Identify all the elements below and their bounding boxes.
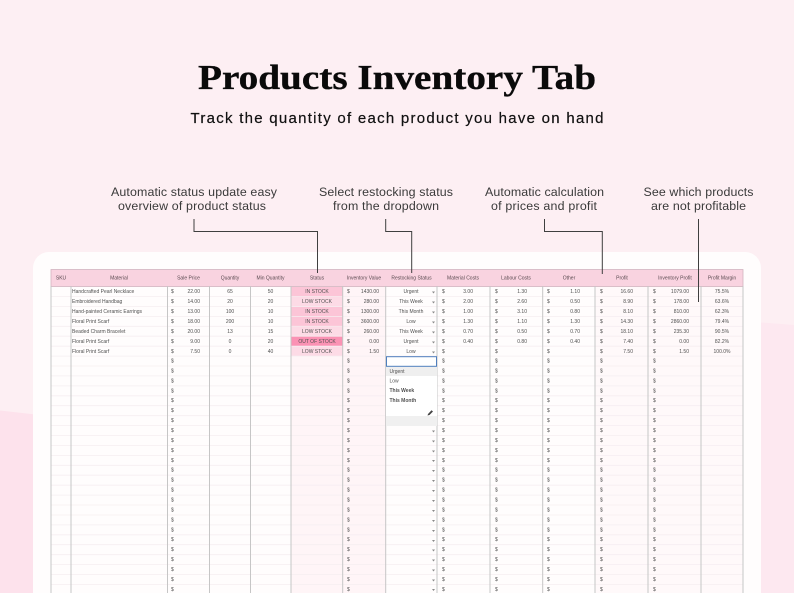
row 1: Urgent — [403, 289, 419, 295]
row 5: $ — [442, 329, 445, 335]
empty rows: currency signs: $$$$$$$ — [171, 388, 656, 394]
row 6: $ — [600, 339, 603, 345]
row 4: 200 — [226, 319, 234, 325]
empty rows: currency signs: $$$$$$$ — [171, 527, 656, 533]
empty rows: currency signs: $$$$$$$ — [171, 488, 656, 494]
callout: automatic calculation — [485, 185, 604, 213]
row 3: 810.00 — [674, 309, 689, 315]
restocking dropdown: Urgent — [390, 369, 405, 375]
row 1: 50 — [268, 289, 273, 295]
row 5: 0.50 — [517, 329, 527, 335]
row 5: 15 — [268, 329, 273, 335]
row 4: $ — [600, 319, 603, 325]
row 7: Floral Print Scarf — [72, 349, 110, 355]
empty rows: currency signs: $$$$$$$ — [171, 547, 656, 553]
row 7: 0 — [229, 349, 232, 355]
header row: Profit — [616, 276, 628, 282]
header row: Status — [310, 276, 325, 282]
empty rows: currency signs: $$$$$$$ — [171, 408, 656, 414]
row 3: 1.00 — [463, 309, 473, 315]
row 6: Urgent — [403, 339, 419, 345]
row 3: 10 — [268, 309, 273, 315]
row 3: $ — [347, 309, 350, 315]
row 6: $ — [653, 339, 656, 345]
row 5: 0.70 — [570, 329, 580, 335]
row 6: 0.00 — [369, 339, 379, 345]
restocking dropdown: This Month — [390, 398, 416, 404]
empty rows: currency signs: $$$$$$$ — [171, 517, 656, 523]
row 4: 1.10 — [517, 319, 527, 325]
header row: Labour Costs — [501, 276, 531, 282]
callout: restocking status — [319, 185, 453, 213]
empty rows: currency signs: $$$$$$$ — [171, 478, 656, 484]
empty rows: currency signs: $$$$$$$ — [171, 587, 656, 593]
row 3: Hand-painted Ceramic Earrings — [72, 309, 143, 315]
row 2: $ — [495, 299, 498, 305]
row 7: $ — [495, 349, 498, 355]
row 4: $ — [495, 319, 498, 325]
row 7: $ — [653, 349, 656, 355]
subtitle: Track the quantity of each product you have on hand — [190, 110, 604, 127]
row 1: 1079.00 — [671, 289, 689, 295]
row 4: $ — [347, 319, 350, 325]
row 4: $ — [653, 319, 656, 325]
callout: restocking status: from the dropdown — [333, 199, 439, 213]
row 7: LOW STOCK — [302, 349, 333, 355]
spreadsheet table — [51, 270, 743, 593]
row 4: IN STOCK — [305, 319, 329, 325]
leader line: profitable — [698, 219, 700, 302]
row 1: 3.00 — [463, 289, 473, 295]
row 2: 0.50 — [570, 299, 580, 305]
row 6: 20 — [268, 339, 273, 345]
row 5: $ — [653, 329, 656, 335]
empty rows: currency signs: $$$$$$$ — [171, 508, 656, 514]
row 6: $ — [171, 339, 174, 345]
row 7: 7.50 — [190, 349, 200, 355]
row 7: 1.50 — [679, 349, 689, 355]
row 7: $ — [600, 349, 603, 355]
row 5: 13 — [227, 329, 233, 335]
row 6 — [72, 339, 730, 345]
row 4: 3600.00 — [361, 319, 379, 325]
callout: automatic calculation: Automatic calculation — [485, 185, 604, 199]
row 6: $ — [442, 339, 445, 345]
header row: Sale Price — [177, 276, 200, 282]
row 6: 0.40 — [570, 339, 580, 345]
row 4: $ — [547, 319, 550, 325]
row 3 — [72, 309, 730, 315]
row 3: 100 — [226, 309, 234, 315]
row 5: 235.30 — [674, 329, 689, 335]
row 2: 8.90 — [623, 299, 633, 305]
row 1: $ — [600, 289, 603, 295]
header row: Quantity — [221, 276, 240, 282]
empty rows: currency signs: $$$$$$$ — [171, 398, 656, 404]
row 1: 1.30 — [517, 289, 527, 295]
row 4: 1.30 — [463, 319, 473, 325]
row 3: $ — [171, 309, 174, 315]
row 2: $ — [347, 299, 350, 305]
row 2: $ — [653, 299, 656, 305]
callout: not profitable — [644, 185, 754, 213]
empty rows: currency signs: $$$$$$$ — [171, 448, 656, 454]
empty rows: currency signs: $$$$$$$ — [171, 567, 656, 573]
row 5: $ — [547, 329, 550, 335]
row 4: 14.30 — [620, 319, 633, 325]
header row: Material Costs — [447, 276, 479, 282]
restocking dropdown: This Week — [390, 388, 414, 394]
row 2: 63.6% — [715, 299, 730, 305]
row 3: $ — [547, 309, 550, 315]
row 3: $ — [442, 309, 445, 315]
empty rows: currency signs: $$$$$$$ — [171, 537, 656, 543]
row 7: $ — [442, 349, 445, 355]
row 4: 2860.00 — [671, 319, 689, 325]
row 7 — [72, 349, 731, 355]
row 2: 20 — [268, 299, 273, 305]
row 5: 0.70 — [463, 329, 473, 335]
row 6: 82.2% — [715, 339, 730, 345]
row 6: 0.00 — [679, 339, 689, 345]
row 1: 1.10 — [570, 289, 580, 295]
panel: spreadsheet card — [33, 252, 761, 593]
row 5: $ — [600, 329, 603, 335]
row 1 — [72, 289, 730, 295]
row 6: 0 — [229, 339, 232, 345]
row 5: $ — [347, 329, 350, 335]
row 5: LOW STOCK — [302, 329, 333, 335]
row 5: 20.00 — [187, 329, 200, 335]
row 5: This Week — [399, 329, 423, 335]
row 7: 7.50 — [623, 349, 633, 355]
header row: Restocking Status — [391, 276, 432, 282]
leader line: calculation — [544, 219, 602, 274]
row 6: 0.80 — [517, 339, 527, 345]
title: Products Inventory Tab — [198, 58, 596, 97]
row 4: Low — [406, 319, 416, 325]
column tints — [291, 286, 386, 593]
header row: Profit Margin — [708, 276, 736, 282]
empty rows: currency signs: $$$$$$$ — [171, 378, 656, 384]
row 3: 8.10 — [623, 309, 633, 315]
restocking dropdown: Low — [390, 378, 399, 384]
row 7: 100.0% — [714, 349, 731, 355]
row 7: Low — [406, 349, 416, 355]
header row: Other — [563, 276, 576, 282]
empty rows: currency signs: $$$$$$$ — [171, 418, 656, 424]
callout: restocking status: Select restocking status — [319, 185, 453, 199]
row 2: LOW STOCK — [302, 299, 333, 305]
row 3: $ — [600, 309, 603, 315]
callout: not profitable: See which products — [644, 185, 754, 199]
row 4: $ — [171, 319, 174, 325]
row 7: $ — [547, 349, 550, 355]
empty rows: currency signs: $$$$$$$ — [171, 428, 656, 434]
row 1: 75.5% — [715, 289, 730, 295]
row 1: $ — [653, 289, 656, 295]
row 2: 2.00 — [463, 299, 473, 305]
leader line: status — [194, 219, 318, 273]
row 7: 1.50 — [369, 349, 379, 355]
empty rows: currency signs: $$$$$$$ — [171, 358, 656, 364]
header row: Material — [110, 276, 128, 282]
row 2: $ — [171, 299, 174, 305]
row 1: 65 — [227, 289, 233, 295]
row 1: 1430.00 — [361, 289, 379, 295]
row 7: $ — [347, 349, 350, 355]
empty rows: currency signs: $$$$$$$ — [171, 498, 656, 504]
callout: not profitable: are not profitable — [651, 199, 746, 213]
row 1: 16.60 — [620, 289, 633, 295]
row 1: $ — [171, 289, 174, 295]
empty rows: currency signs — [171, 358, 656, 593]
header row — [51, 270, 743, 286]
row 6: 9.00 — [190, 339, 200, 345]
row 2: 178.00 — [674, 299, 689, 305]
row 2: 14.00 — [187, 299, 200, 305]
row 5: 18.10 — [620, 329, 633, 335]
row 6: $ — [547, 339, 550, 345]
empty rows: currency signs: $$$$$$$ — [171, 438, 656, 444]
row 6: OUT OF STOCK — [298, 339, 336, 345]
leader line: restocking — [386, 219, 412, 273]
row 2: 280.00 — [364, 299, 379, 305]
row 4: Floral Print Scarf — [72, 319, 110, 325]
row 2: 2.60 — [517, 299, 527, 305]
row 2: This Week — [399, 299, 423, 305]
row 4: 79.4% — [715, 319, 730, 325]
row 6: 0.40 — [463, 339, 473, 345]
row 5: Beaded Charm Bracelet — [72, 329, 126, 335]
row 4: 10 — [268, 319, 273, 325]
restocking dropdown — [386, 357, 437, 426]
row 5: $ — [495, 329, 498, 335]
empty rows: currency signs: $$$$$$$ — [171, 557, 656, 563]
header row: SKU — [56, 276, 67, 282]
row 3: $ — [653, 309, 656, 315]
row 2: $ — [442, 299, 445, 305]
row 2 — [72, 299, 730, 305]
row 3: IN STOCK — [305, 309, 329, 315]
row 5: $ — [171, 329, 174, 335]
row 1: $ — [547, 289, 550, 295]
row 3: This Month — [399, 309, 424, 315]
row 4: 1.30 — [570, 319, 580, 325]
icon: pencil — [428, 410, 433, 416]
row 3: 3.10 — [517, 309, 527, 315]
row 5: 90.5% — [715, 329, 730, 335]
row 5 — [72, 329, 730, 335]
empty rows: currency signs: $$$$$$$ — [171, 368, 656, 374]
row 3: $ — [495, 309, 498, 315]
row 1: $ — [495, 289, 498, 295]
row 3: 1300.00 — [361, 309, 379, 315]
row 2: 20 — [227, 299, 233, 305]
row 2: Embroidered Handbag — [72, 299, 123, 305]
callout: status update: Automatic status update easy — [111, 185, 278, 199]
row 6: Floral Print Scarf — [72, 339, 110, 345]
row 1: Handcrafted Pearl Necklace — [72, 289, 134, 295]
header row: Inventory Value — [347, 276, 381, 282]
empty rows: currency signs: $$$$$$$ — [171, 468, 656, 474]
header row: Inventory Profit — [658, 276, 692, 282]
row 3: 62.3% — [715, 309, 730, 315]
callout: status update — [111, 185, 278, 213]
row 5: 260.00 — [364, 329, 379, 335]
callout: automatic calculation: of prices and profit — [491, 199, 598, 213]
row 2: $ — [547, 299, 550, 305]
row 4: $ — [442, 319, 445, 325]
row 7: $ — [171, 349, 174, 355]
header row: Min Quantity — [256, 276, 285, 282]
row 6: 7.40 — [623, 339, 633, 345]
row 6: $ — [347, 339, 350, 345]
row 1: $ — [347, 289, 350, 295]
row 7: 40 — [268, 349, 273, 355]
dropdown arrows — [432, 292, 435, 591]
row 4: 18.00 — [187, 319, 200, 325]
row 2: $ — [600, 299, 603, 305]
empty rows: currency signs: $$$$$$$ — [171, 458, 656, 464]
row 1: IN STOCK — [305, 289, 329, 295]
empty rows: currency signs: $$$$$$$ — [171, 577, 656, 583]
row 4 — [72, 319, 730, 325]
row 3: 13.00 — [187, 309, 200, 315]
row 3: 0.80 — [570, 309, 580, 315]
status cells — [292, 287, 342, 356]
row 1: 22.00 — [187, 289, 200, 295]
row 1: $ — [442, 289, 445, 295]
callout: status update: overview of product status — [118, 199, 266, 213]
row 6: $ — [495, 339, 498, 345]
